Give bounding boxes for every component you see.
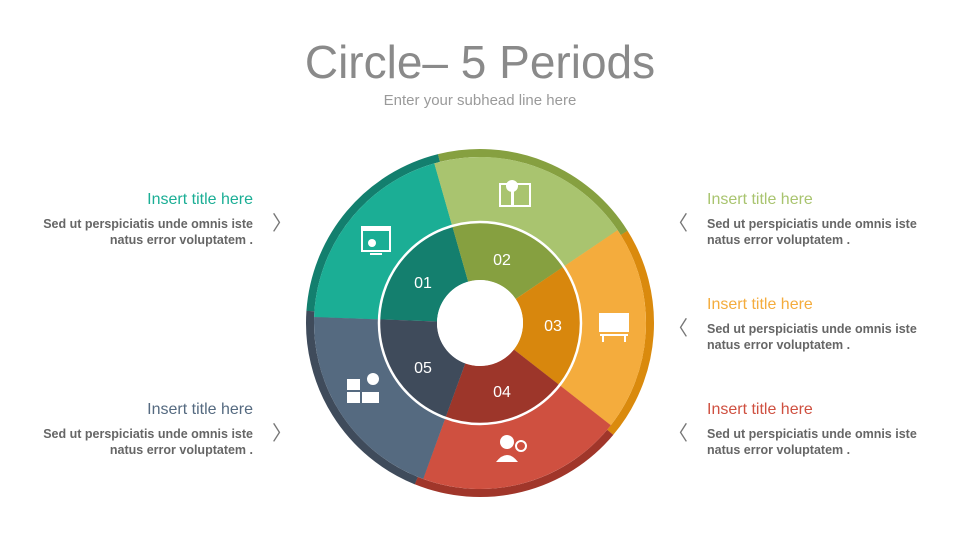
circle chart: 05 bbox=[414, 360, 432, 377]
icon: map bbox=[500, 180, 530, 206]
text: 〉 bbox=[272, 423, 292, 445]
text: item 03: Sed ut perspiciatis unde omnis iste natus error voluptatem . bbox=[707, 322, 917, 352]
text: item 04 bbox=[707, 401, 917, 457]
text: item 02: Sed ut perspiciatis unde omnis iste natus error voluptatem . bbox=[707, 217, 917, 247]
text: item 01: Sed ut perspiciatis unde omnis iste natus error voluptatem . bbox=[43, 217, 253, 247]
text: item 05: Insert title here bbox=[147, 401, 253, 418]
circle chart: 02 bbox=[493, 252, 511, 269]
text: item 04: Insert title here bbox=[707, 401, 813, 418]
text: 〈 bbox=[668, 213, 688, 235]
arrows bbox=[272, 213, 688, 445]
text: item 02 bbox=[707, 191, 917, 247]
title: Circle– 5 Periods bbox=[305, 36, 655, 88]
subhead: Enter your subhead line here bbox=[384, 92, 576, 109]
text: item 04: Sed ut perspiciatis unde omnis iste natus error voluptatem . bbox=[707, 427, 917, 457]
circle chart: 04 bbox=[493, 384, 511, 401]
icon: puzzle bbox=[347, 373, 379, 403]
text: item 05 bbox=[43, 401, 253, 457]
text: item 05: Sed ut perspiciatis unde omnis iste natus error voluptatem . bbox=[43, 427, 253, 457]
icon: monitor bbox=[362, 227, 390, 255]
circle chart: 03 bbox=[544, 318, 562, 335]
text: item 03: Insert title here bbox=[707, 296, 813, 313]
text: item 01 bbox=[43, 191, 253, 247]
text: 〉 bbox=[272, 213, 292, 235]
text: 〈 bbox=[668, 318, 688, 340]
text: 〈 bbox=[668, 423, 688, 445]
icon: person bbox=[496, 435, 526, 462]
text: item 01: Insert title here bbox=[147, 191, 253, 208]
icon: board bbox=[599, 313, 629, 342]
text: item 02: Insert title here bbox=[707, 191, 813, 208]
text: item 03 bbox=[707, 296, 917, 352]
circle chart: 01 bbox=[414, 275, 432, 292]
